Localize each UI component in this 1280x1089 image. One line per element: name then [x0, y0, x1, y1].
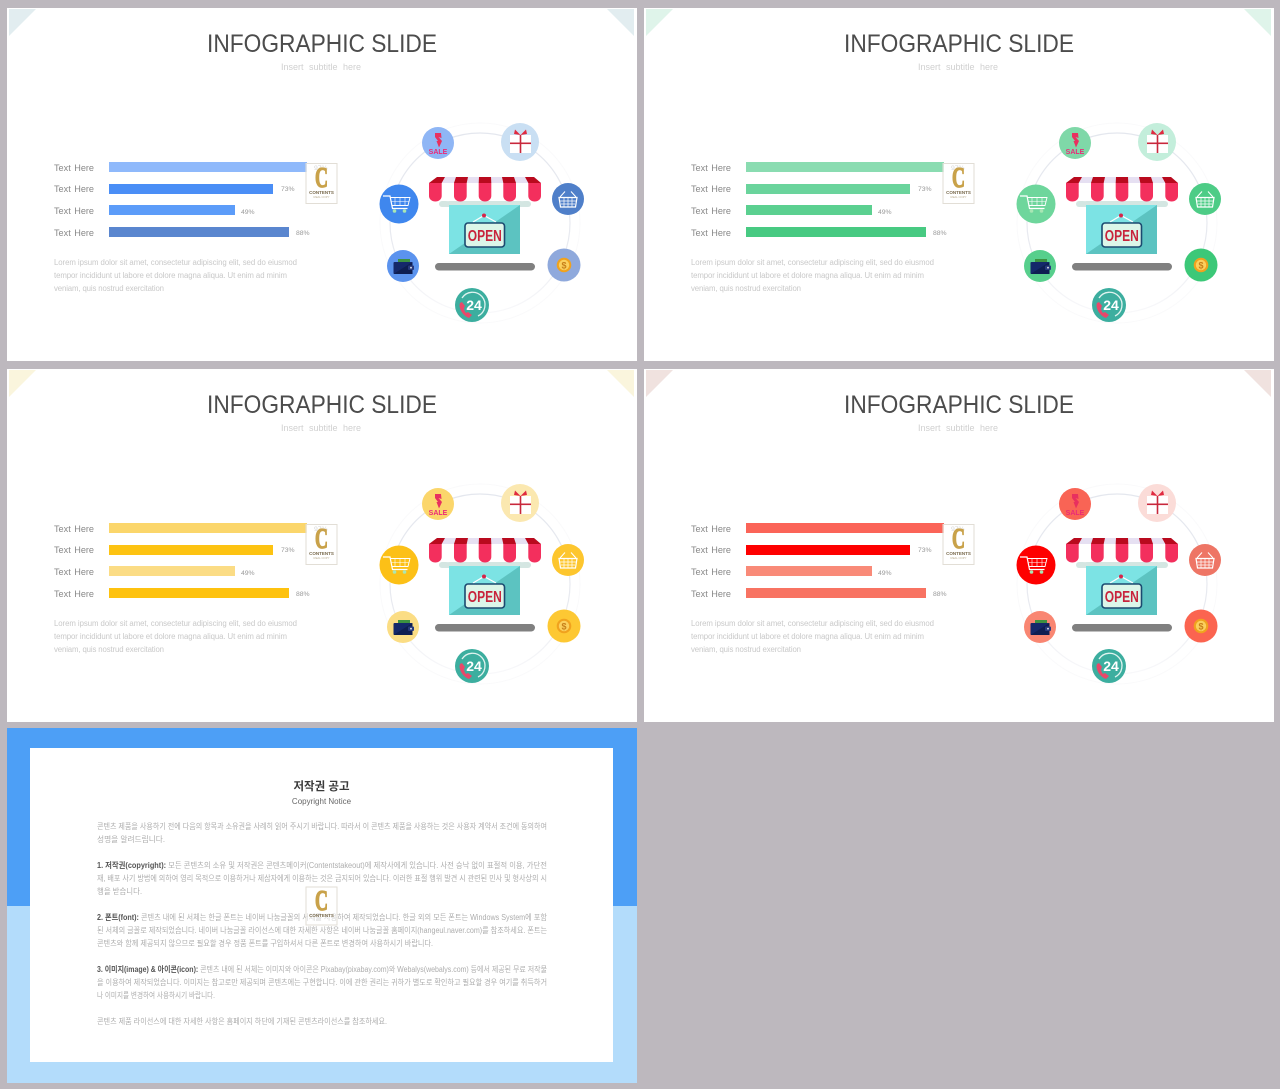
icon: 24 hours — [1092, 288, 1126, 322]
section 3 — [97, 964, 547, 1000]
watermark logo: CONTENTS — [309, 190, 334, 195]
icon: coin: $ — [1198, 260, 1204, 270]
body text: Lorem ipsum dolor sit amet, consectetur adipiscing elit, sed do eiusmod — [691, 258, 934, 267]
watermark logo: REAL COPY — [314, 195, 330, 199]
body text — [691, 619, 934, 654]
bar chart: Text Here — [54, 206, 94, 217]
bar chart: 88% — [296, 230, 310, 237]
bar chart: 73% — [281, 186, 295, 193]
bar chart: 88% — [933, 230, 947, 237]
body text: tempor incididunt ut labore et dolore magna aliqua. Ut enim ad minim — [54, 271, 287, 280]
icon: sale — [1059, 127, 1091, 159]
icon: sale: SALE — [429, 149, 448, 156]
panel: copyright notice — [7, 728, 637, 1083]
watermark logo: REAL COPY — [951, 556, 967, 560]
bar chart: 97% — [951, 165, 965, 172]
body text — [691, 258, 934, 293]
watermark logo — [943, 523, 974, 564]
intro text: 성명을 알려드립니다. — [97, 834, 165, 844]
icon: cart — [380, 184, 418, 224]
section 1 — [97, 860, 547, 896]
watermark logo: CONTENTS — [309, 551, 334, 556]
watermark logo: C — [315, 162, 328, 194]
icon: coin — [548, 248, 580, 282]
body text: tempor incididunt ut labore et dolore magna aliqua. Ut enim ad minim — [691, 632, 924, 641]
store diagram — [1016, 484, 1221, 684]
icon: sale: SALE — [1066, 510, 1085, 517]
icon: shop — [429, 538, 541, 632]
bar chart: Text Here — [54, 228, 94, 239]
icon: coin: $ — [1198, 622, 1204, 632]
icon: 24 hours — [1092, 649, 1126, 683]
body text: veniam, quis nostrud exercitation — [54, 284, 164, 293]
icon: coin — [1184, 248, 1218, 282]
bar chart — [691, 162, 965, 239]
bar chart: 49% — [241, 209, 255, 216]
icon: shop — [1066, 177, 1178, 270]
section 1: 행을 받습니다. — [97, 886, 142, 896]
bar chart: Text Here — [691, 589, 731, 600]
bar chart: 97% — [314, 526, 328, 533]
bar chart: 49% — [878, 209, 892, 216]
watermark logo: C — [315, 523, 328, 555]
icon: wallet — [387, 611, 419, 643]
icon: coin — [548, 610, 580, 642]
subtitle: Insert subtitle here — [918, 62, 998, 72]
watermark logo: CONTENTS — [946, 190, 971, 195]
bar chart: 97% — [951, 526, 965, 533]
title: INFOGRAPHIC SLIDE — [844, 30, 1074, 58]
bar chart — [691, 523, 965, 600]
bar chart: Text Here — [54, 163, 94, 174]
subtitle: Insert subtitle here — [918, 423, 998, 433]
bar chart: Text Here — [54, 589, 94, 600]
intro text — [97, 821, 547, 844]
icon: shop — [429, 177, 541, 270]
icon: 24 hours: 24 — [1103, 297, 1119, 313]
body text: tempor incididunt ut labore et dolore magna aliqua. Ut enim ad minim — [691, 271, 924, 280]
icon: basket — [552, 544, 584, 576]
icon: basket — [1189, 183, 1221, 215]
bar chart: 97% — [314, 165, 328, 172]
bar chart: Text Here — [691, 524, 731, 535]
section 2: 콘텐츠와 함께 제공되지 않으므로 필요할 경우 정품 폰트를 구입하셔서 다른 폰트로 변경하여 사용하시기 바랍니다. — [97, 938, 433, 948]
subtitle: Insert subtitle here — [281, 423, 361, 433]
watermark logo: C — [952, 523, 965, 555]
watermark logo: C — [952, 162, 965, 194]
bar chart: Text Here — [691, 184, 731, 195]
bar chart: Text Here — [691, 545, 731, 556]
icon: 24 hours: 24 — [466, 297, 482, 313]
panel: blue slide — [7, 8, 637, 361]
subtitle: Insert subtitle here — [281, 62, 361, 72]
section 2 — [97, 912, 548, 948]
body text: Lorem ipsum dolor sit amet, consectetur adipiscing elit, sed do eiusmod — [691, 619, 934, 628]
icon: coin: $ — [561, 622, 567, 632]
bar chart: Text Here — [691, 228, 731, 239]
bar chart: Text Here — [54, 184, 94, 195]
watermark logo — [306, 885, 337, 925]
body text: veniam, quis nostrud exercitation — [54, 645, 164, 654]
subheading: Copyright Notice — [292, 797, 352, 806]
icon: cart — [1016, 546, 1056, 584]
bar chart: Text Here — [691, 567, 731, 578]
title: INFOGRAPHIC SLIDE — [207, 391, 437, 419]
bar chart — [54, 162, 328, 239]
icon: sale: SALE — [429, 510, 448, 517]
icon: 24 hours — [455, 649, 489, 683]
body text: Lorem ipsum dolor sit amet, consectetur adipiscing elit, sed do eiusmod — [54, 258, 297, 267]
icon: basket — [552, 183, 584, 215]
intro text: 콘텐츠 제품을 사용하기 전에 다음의 항목과 소유권을 사례히 읽어 주시기 바랍니다. 따라서 이 콘텐츠 제품을 사용하는 것은 사용자 계약서 조건에 동의하여 — [97, 821, 547, 831]
icon: gift — [501, 484, 539, 522]
icon: shop: OPEN — [468, 228, 502, 245]
icon: 24 hours: 24 — [1103, 658, 1119, 674]
icon: cart — [380, 546, 418, 584]
icon: shop: OPEN — [1105, 589, 1139, 606]
icon: gift — [1138, 123, 1176, 161]
store diagram — [380, 123, 584, 323]
watermark logo: REAL COPY — [951, 195, 967, 199]
icon: wallet — [387, 250, 419, 282]
icon: sale: SALE — [1066, 149, 1085, 156]
icon: basket — [1189, 544, 1221, 576]
bar chart: 73% — [281, 547, 295, 554]
body text: veniam, quis nostrud exercitation — [691, 284, 801, 293]
watermark logo: REAL COPY — [314, 556, 330, 560]
bar chart: 73% — [918, 186, 932, 193]
body text: Lorem ipsum dolor sit amet, consectetur adipiscing elit, sed do eiusmod — [54, 619, 297, 628]
section 3: 3. 이미지(image) & 아이콘(icon): 콘텐츠 내에 된 서체는 이미지와 아이콘은 Pixabay(pixabay.com)와 Webalys(webalys.com) 등에서 제공된 무료 저작물 — [97, 964, 547, 974]
bar chart: Text Here — [54, 524, 94, 535]
closing text: 콘텐츠 제품 라이선스에 대한 자세한 사항은 홈페이지 하단에 기재된 콘텐츠라이선스를 참조하세요. — [97, 1016, 387, 1026]
watermark logo — [306, 523, 337, 564]
section 3: 을 이용하여 제작되었습니다. 이미지는 참고로만 제공되며 콘텐츠에는 구현합니다. 이에 관한 권리는 귀하가 별도로 확인하고 필요할 경우 여기를 취득하거 — [97, 977, 547, 987]
icon: coin: $ — [561, 260, 567, 270]
section 1: 1. 저작권(copyright): 모든 콘텐츠의 소유 및 저작권은 콘텐츠메이커(Contentstakeout)에 제작사에게 있습니다. 사전 승낙 없이 표절적 이용, 가단전 — [97, 860, 547, 870]
panel: red slide — [644, 369, 1274, 722]
store diagram — [380, 484, 584, 684]
bar chart: 88% — [296, 591, 310, 598]
bar chart: 73% — [918, 547, 932, 554]
icon: 24 hours — [455, 288, 489, 322]
bar chart: Text Here — [691, 206, 731, 217]
icon: gift — [501, 123, 539, 161]
watermark logo — [943, 162, 974, 204]
icon: wallet — [1024, 250, 1056, 282]
icon: sale — [422, 127, 454, 159]
heading: 저작권 공고 — [293, 779, 350, 793]
bar chart: 49% — [878, 570, 892, 577]
panel: green slide — [644, 8, 1274, 361]
watermark logo: C — [315, 885, 328, 917]
bar chart: Text Here — [54, 545, 94, 556]
panel: yellow slide — [7, 369, 637, 722]
bar chart: 88% — [933, 591, 947, 598]
icon: shop — [1066, 538, 1178, 632]
icon: 24 hours: 24 — [466, 658, 482, 674]
store diagram — [1016, 123, 1221, 323]
icon: shop: OPEN — [1105, 228, 1139, 245]
icon: wallet — [1024, 611, 1056, 643]
icon: coin — [1184, 610, 1218, 642]
section 2: 2. 폰트(font): 콘텐츠 내에 된 서체는 한글 폰트는 네이버 나눔글꼴의 서체를 사용하여 제작되었습니다. 한글 외의 모든 폰트는 Windows System에 포함 — [97, 912, 548, 922]
section 3: 나 이미지를 변경하여 사용하시기 바랍니다. — [97, 990, 215, 1000]
body text — [54, 619, 297, 654]
section 1: 재, 배포 사기 방법에 의하여 영리 목적으로 이용하거나 제삼자에게 이용하는 것은 금지되어 있습니다. 이러한 표절 행위 발견 시 관련된 민사 및 형사상의 시 — [97, 873, 547, 883]
bar chart: Text Here — [54, 567, 94, 578]
icon: cart — [1016, 184, 1056, 224]
watermark logo: CONTENTS — [946, 551, 971, 556]
bar chart — [54, 523, 328, 600]
icon: sale — [422, 488, 454, 520]
bar chart: Text Here — [691, 163, 731, 174]
body text — [54, 258, 297, 293]
watermark logo — [306, 162, 337, 204]
title: INFOGRAPHIC SLIDE — [207, 30, 437, 58]
body text: veniam, quis nostrud exercitation — [691, 645, 801, 654]
icon: sale — [1059, 488, 1091, 520]
watermark logo: CONTENTS — [309, 913, 334, 918]
icon: shop: OPEN — [468, 589, 502, 606]
title: INFOGRAPHIC SLIDE — [844, 391, 1074, 419]
body text: tempor incididunt ut labore et dolore magna aliqua. Ut enim ad minim — [54, 632, 287, 641]
section 2: 된 서체의 글꼴로 제작되었습니다. 네이버 나눔글꼴 라이선스에 대한 자세한 사항은 네이버 나눔글꼴 홈페이지(hangeul.naver.com)를 참조하세요. 폰트는 — [97, 925, 547, 935]
icon: gift — [1138, 484, 1176, 522]
bar chart: 49% — [241, 570, 255, 577]
